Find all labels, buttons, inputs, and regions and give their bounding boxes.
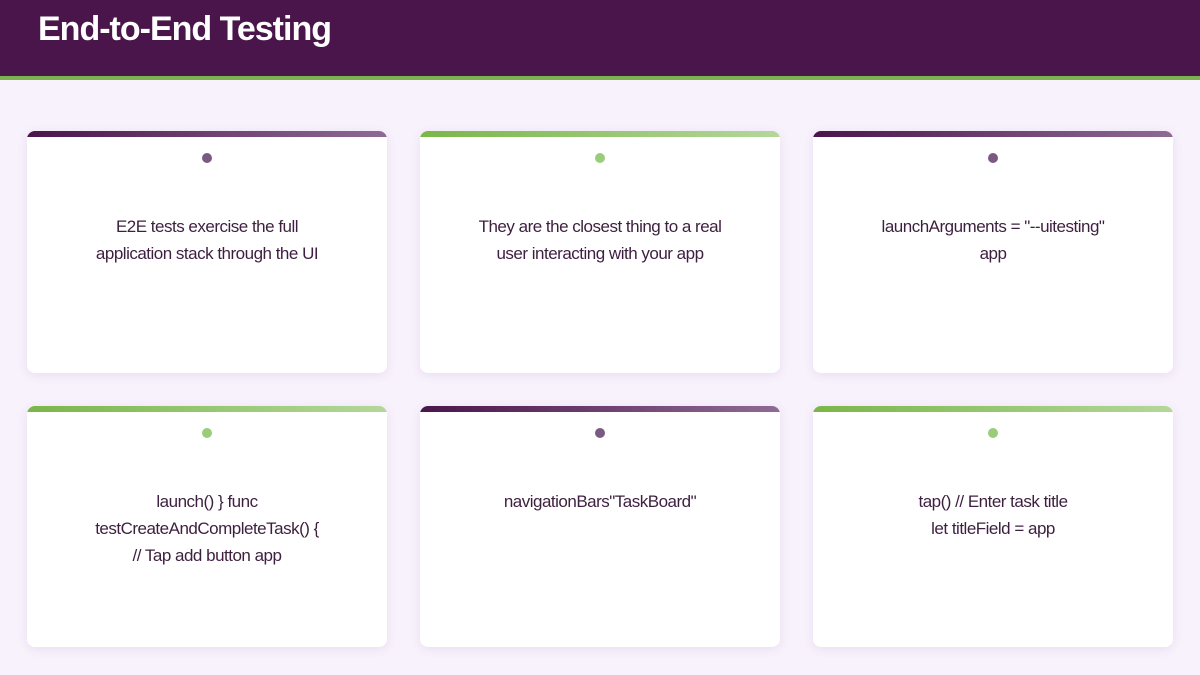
card 1 (27, 131, 387, 373)
card 2: They are the closest thing to a real (479, 217, 721, 236)
card 4 (27, 406, 387, 647)
card 3: app (980, 244, 1006, 263)
card 4: testCreateAndCompleteTask() { (95, 519, 319, 538)
card 1: application stack through the UI (96, 244, 318, 263)
card 5 (420, 406, 780, 647)
card 2: user interacting with your app (496, 244, 704, 263)
card 4: // Tap add button app (133, 546, 281, 565)
card 5: navigationBars"TaskBoard" (504, 492, 696, 511)
card 6: tap() // Enter task title (918, 492, 1068, 511)
card 6 (813, 406, 1173, 647)
card 4: launch() } func (156, 492, 258, 511)
card 3: launchArguments = "--uitesting" (882, 217, 1104, 236)
card 2 (420, 131, 780, 373)
header bar (0, 0, 1200, 76)
card 6: let titleField = app (931, 519, 1055, 538)
card 3 (813, 131, 1173, 373)
card 1: E2E tests exercise the full (116, 217, 298, 236)
title: End-to-End Testing (38, 10, 331, 48)
